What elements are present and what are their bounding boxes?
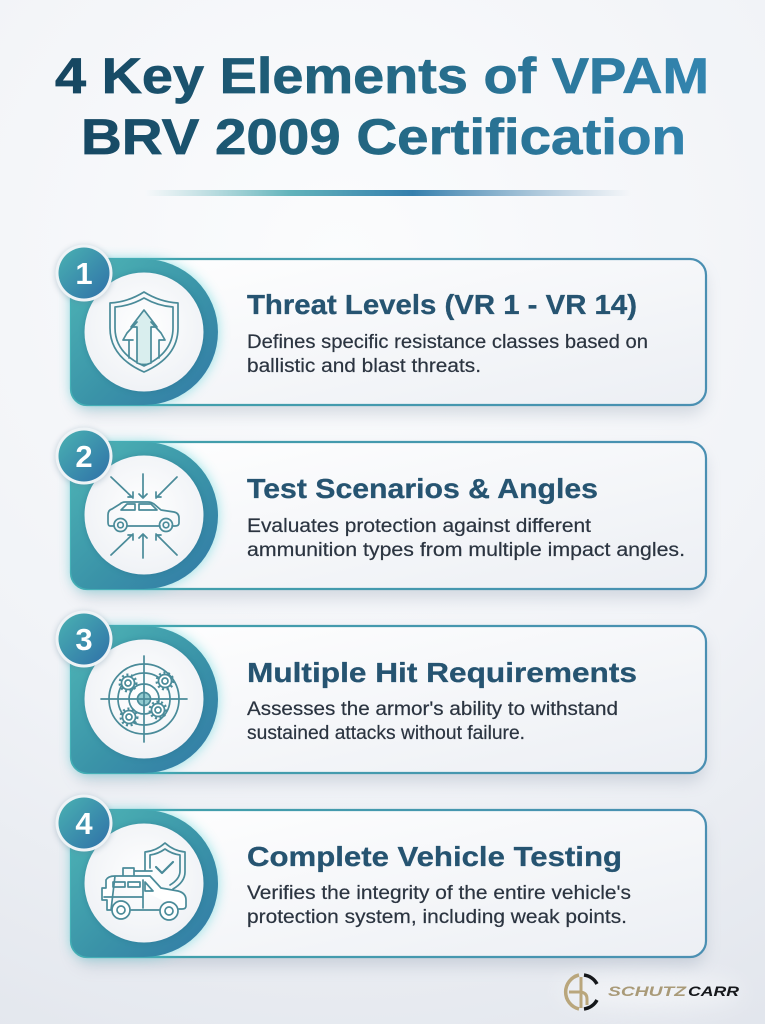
icon: armored vehicle with shield	[102, 843, 186, 920]
description: ballistic and blast threats.	[247, 356, 481, 377]
logo wordmark: CARR	[688, 983, 740, 999]
number badge 1	[55, 244, 113, 303]
logo mark	[566, 975, 597, 1009]
description	[247, 516, 685, 561]
description: Defines specific resistance classes based on	[247, 332, 648, 353]
description: Evaluates protection against different	[247, 516, 592, 537]
panel: multiple hit requirements	[55, 610, 706, 782]
logo: SchutzCarr	[558, 975, 742, 1009]
description: sustained attacks without failure.	[247, 723, 525, 744]
heading: Test Scenarios & Angles	[247, 473, 598, 504]
number badge 2: 2	[75, 439, 93, 474]
heading: Complete Vehicle Testing	[247, 841, 622, 872]
description: protection system, including weak points.	[247, 907, 627, 928]
description	[247, 332, 648, 377]
icon: car with impact arrows	[108, 474, 179, 558]
panel: complete vehicle testing	[55, 794, 706, 966]
number badge 3: 3	[75, 622, 93, 657]
number badge 4	[55, 794, 113, 853]
heading: Threat Levels (VR 1 - VR 14)	[247, 289, 637, 320]
number badge 1: 1	[75, 256, 93, 291]
panel: test scenarios	[55, 428, 706, 598]
description: Verifies the integrity of the entire vehicle's	[247, 883, 631, 904]
logo wordmark: SCHUTZ	[608, 983, 687, 999]
heading: Multiple Hit Requirements	[247, 657, 637, 688]
panel: threat levels	[55, 244, 706, 414]
number badge 4: 4	[75, 806, 93, 841]
title: 4 Key Elements of VPAM	[55, 48, 709, 104]
icon: target with bullet holes	[101, 656, 187, 742]
title	[55, 48, 709, 165]
number badge 2	[55, 428, 113, 486]
description: Assesses the armor's ability to withstand	[247, 699, 618, 720]
description	[247, 883, 631, 928]
logo wordmark	[608, 983, 740, 999]
title: BRV 2009 Certification	[81, 109, 686, 165]
description: ammunition types from multiple impact angles.	[247, 540, 685, 561]
description	[247, 699, 618, 744]
number badge 3	[55, 610, 113, 669]
icon: shield with arrows	[110, 292, 178, 372]
